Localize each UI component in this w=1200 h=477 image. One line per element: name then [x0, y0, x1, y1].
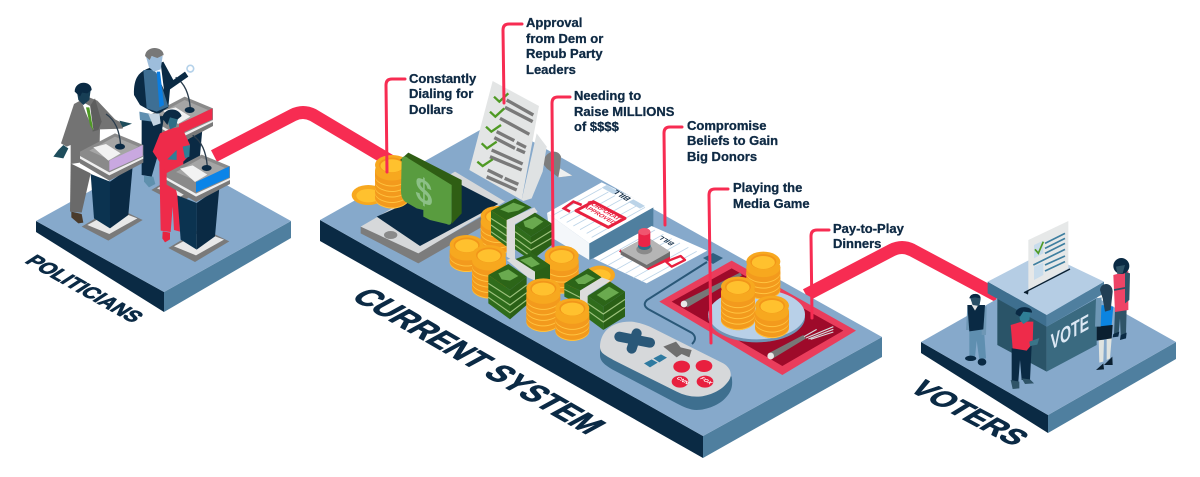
panel: current system platform	[320, 121, 882, 458]
callout: playing the media game: Playing the	[733, 180, 802, 195]
figure: man in navy suit	[134, 48, 194, 187]
callout: compromise beliefs: Compromise	[687, 118, 766, 133]
callout: approval from party leaders: Leaders	[526, 62, 576, 77]
callout: compromise beliefs: Big Donors	[687, 149, 757, 164]
icon: phone with coins and money bubble: $	[415, 168, 432, 216]
callout: compromise beliefs	[664, 118, 778, 225]
icon: stacked bill with corporate approved stamp: APPROVED	[581, 204, 618, 226]
callout: playing the media game	[709, 180, 810, 343]
podium: back red	[150, 77, 213, 204]
icon: bill with red button	[593, 226, 707, 283]
figure: man in red sweater	[1011, 307, 1039, 389]
callout: needing to raise millions: Raise MILLIONS	[574, 104, 675, 119]
icon: ballot box: VOTE	[1051, 309, 1089, 355]
icon: game controller: FOX	[698, 377, 713, 386]
icon: game controller: CNN	[674, 376, 690, 385]
callout: constantly dialing	[386, 71, 477, 172]
callout: compromise beliefs: Beliefs to Gain	[687, 133, 778, 148]
figure: woman in pink dress	[1113, 258, 1130, 340]
icon: checklist paper	[469, 81, 572, 201]
icon: game controller	[600, 322, 732, 410]
coins: behind cash	[481, 206, 515, 254]
figure: woman in red suit	[153, 109, 190, 242]
figure: man in gray suit	[53, 83, 132, 223]
callout: approval from party leaders: from Dem or	[526, 31, 603, 46]
icon: cash and coin pile	[450, 198, 625, 341]
callout: playing the media game: Media Game	[733, 196, 810, 211]
callout: constantly dialing: Dialing for	[409, 86, 473, 101]
icon: dinner placemat with coins on plate	[659, 252, 856, 375]
politicians figures	[53, 48, 230, 262]
callout: needing to raise millions: Needing to	[574, 88, 641, 103]
callout: approval from party leaders	[503, 15, 603, 103]
podium: right blue	[167, 135, 230, 262]
callout: constantly dialing: Dollars	[409, 102, 453, 117]
panel: voters platform	[921, 270, 1176, 433]
voters scene	[965, 221, 1130, 389]
panel: politicians platform	[36, 150, 291, 312]
callout: approval from party leaders: Repub Party	[526, 46, 603, 61]
icon: stacked bill with corporate approved stamp: BILL	[610, 188, 633, 202]
callout: constantly dialing: Constantly	[409, 71, 477, 86]
connector: current system to voters	[806, 248, 998, 296]
title: voters: VOTERS	[902, 376, 1036, 450]
callout: pay-to-play dinners: Pay-to-Play	[833, 221, 905, 236]
callout: pay-to-play dinners	[811, 221, 905, 318]
icon: phone with coins and money bubble	[352, 153, 505, 263]
cash: back bundle	[491, 198, 552, 262]
figure: man in vest	[965, 294, 987, 366]
icon: stacked bill with corporate approved stamp: CORPORATE	[585, 200, 625, 223]
icon: cable	[645, 262, 707, 344]
callout: needing to raise millions	[552, 88, 675, 246]
callout: needing to raise millions: of $$$$	[574, 119, 620, 134]
podium: left lilac	[80, 114, 143, 241]
callout: approval from party leaders: Approval	[526, 15, 582, 30]
icon: stacked bill with corporate approved stamp	[547, 182, 653, 260]
cash: right bundle	[564, 268, 625, 330]
figure: woman in blue top	[1095, 284, 1113, 370]
cash: front bundle	[488, 253, 550, 319]
connector: politicians to current system	[214, 112, 392, 162]
icon: bill with red button: BILL	[657, 234, 677, 246]
title: current system: CURRENT SYSTEM	[343, 284, 613, 439]
callout: pay-to-play dinners: Dinners	[833, 236, 881, 251]
icon: ballot box	[988, 221, 1104, 372]
icon: chip	[703, 253, 723, 264]
title: politicians: POLITICIANS	[20, 252, 148, 326]
